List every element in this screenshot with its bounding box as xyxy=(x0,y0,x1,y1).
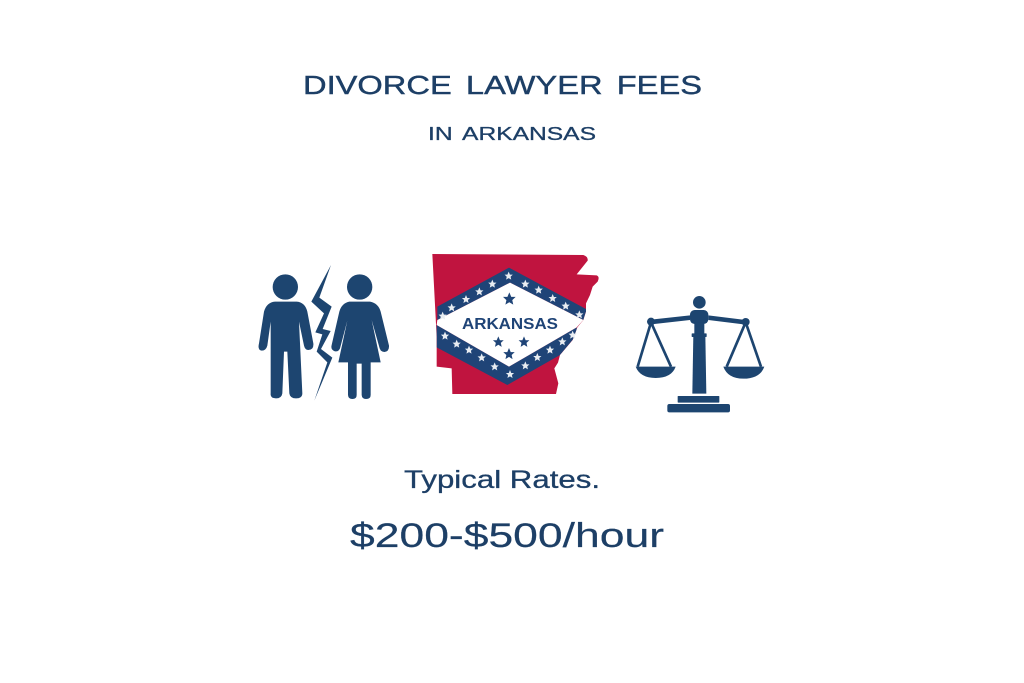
white stars xyxy=(439,272,583,378)
title: DIVORCE LAWYER FEES xyxy=(303,72,702,100)
icon: Arkansas state map with flag xyxy=(432,254,599,394)
hourly rate value: $200-$500/hour xyxy=(350,517,664,555)
icon: woman xyxy=(331,274,389,399)
typical rates label: Typical Rates. xyxy=(404,466,600,494)
flag diamond xyxy=(437,268,587,385)
icon: man xyxy=(259,274,313,398)
icon: lightning bolt xyxy=(311,265,332,401)
map label: ARKANSAS xyxy=(462,316,558,333)
icon: scales of justice xyxy=(636,296,764,412)
map shape xyxy=(432,254,599,394)
blue stars xyxy=(493,292,529,359)
subtitle: IN ARKANSAS xyxy=(428,123,596,144)
icon: divorced couple with lightning bolt xyxy=(259,265,389,401)
